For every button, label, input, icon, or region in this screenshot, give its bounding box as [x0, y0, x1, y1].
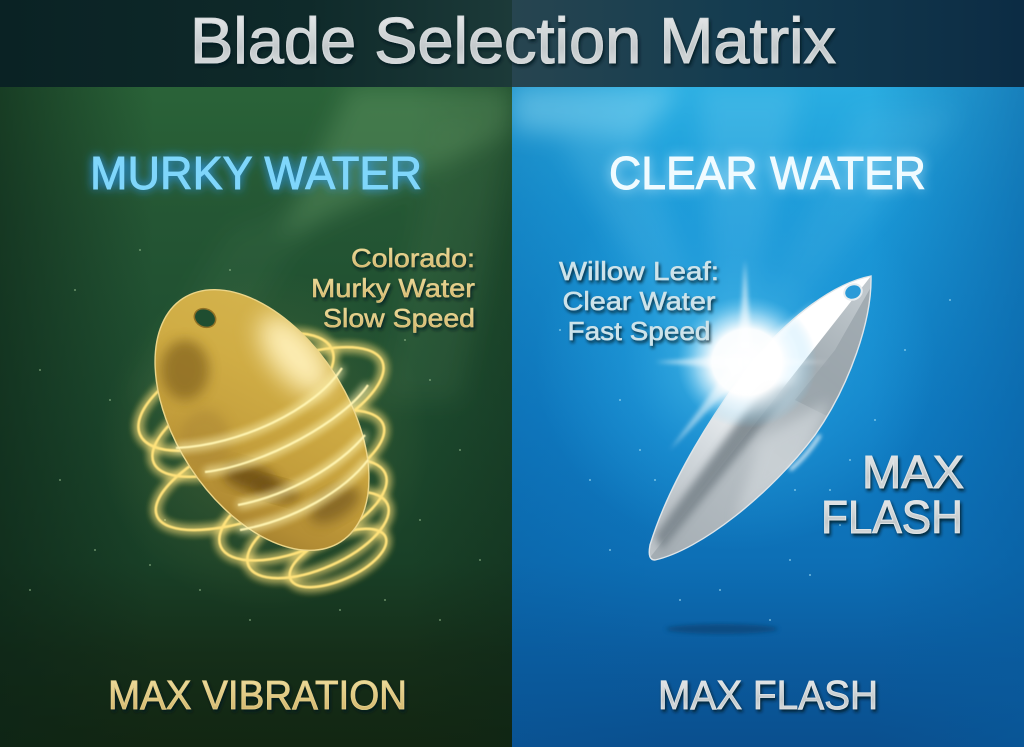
callout: max flash: MAX: [862, 446, 964, 498]
particles: murky water: [29, 249, 481, 621]
colorado blade body: [154, 289, 370, 551]
callout: colorado: Colorado:: [351, 243, 475, 273]
heading: clear water: CLEAR WATER: [609, 147, 926, 199]
light flare: [677, 296, 817, 428]
panel: murky water: [0, 87, 512, 747]
shadow under blade: [666, 624, 778, 634]
colorado blade with vibration rings: [128, 289, 399, 598]
callout: colorado: [311, 243, 475, 333]
callout: colorado: Slow Speed: [323, 303, 475, 333]
callout: willow leaf: Fast Speed: [568, 316, 710, 346]
vibration rings: back: [122, 309, 401, 599]
panel: clear water: [512, 87, 1024, 747]
callout: willow leaf: [559, 256, 719, 346]
callout: max flash: [821, 446, 964, 543]
vibration rings: front arcs: [176, 368, 368, 530]
callout: willow leaf: Willow Leaf:: [559, 256, 719, 286]
callout: max flash: FLASH: [821, 491, 963, 543]
heading: murky water: MURKY WATER: [90, 147, 422, 199]
callout: willow leaf: Clear Water: [562, 286, 716, 316]
label: max flash: MAX FLASH: [658, 672, 878, 718]
particles: clear water: [559, 299, 951, 621]
willow leaf blade: [640, 260, 880, 560]
blade hole: [842, 281, 864, 303]
blade hole: [191, 305, 219, 331]
title bar: [0, 0, 1024, 87]
title: Blade Selection Matrix: [190, 4, 836, 77]
callout: colorado: Murky Water: [311, 273, 475, 303]
label: max vibration: MAX VIBRATION: [108, 672, 407, 718]
